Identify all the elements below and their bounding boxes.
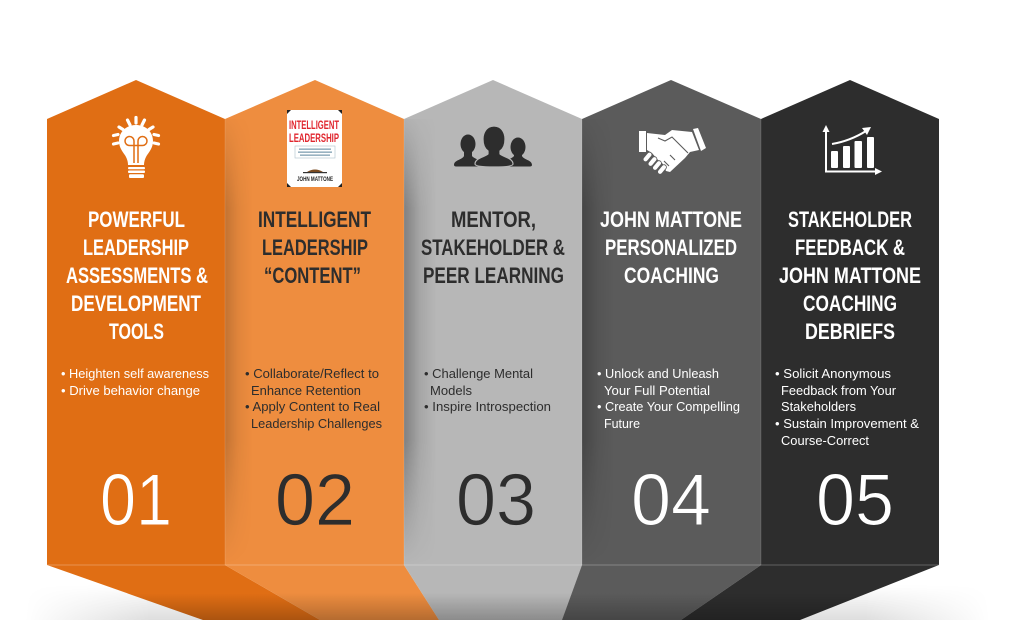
bullets 01 (61, 366, 209, 398)
heading 05 (779, 207, 921, 344)
heading 01: POWERFUL (88, 207, 185, 232)
panel 02 body (225, 80, 404, 565)
bullets 03: Models (430, 383, 472, 398)
heading 01: LEADERSHIP (83, 235, 189, 260)
bullets 04: • Unlock and Unleash (597, 366, 719, 381)
heading 02: “CONTENT” (264, 263, 361, 288)
panel: 04 personalized coaching (562, 80, 761, 620)
panel 05 base (681, 565, 939, 620)
bullets 02: Enhance Retention (251, 383, 361, 398)
bullets 05: Stakeholders (781, 399, 856, 414)
panel 03 base (404, 565, 582, 620)
icon: people group (454, 126, 532, 167)
heading 05: DEBRIEFS (805, 319, 895, 344)
panel 01 base (47, 565, 320, 620)
icon: book cover: INTELLIGENT (289, 118, 339, 132)
bullets 03: • Inspire Introspection (424, 399, 551, 414)
panel 02 base (225, 565, 439, 620)
heading 04: COACHING (624, 263, 719, 288)
ground shadow (57, 594, 958, 620)
heading 02: INTELLIGENT (258, 207, 371, 232)
bullets 05 (775, 366, 919, 448)
heading 01 (66, 207, 208, 344)
bullets 01: • Heighten self awareness (61, 366, 209, 381)
panel: 01 powerful leadership assessments (47, 80, 320, 620)
heading 02: LEADERSHIP (262, 235, 368, 260)
panel: 05 feedback and debriefs (681, 80, 939, 620)
icon: handshake (639, 128, 706, 175)
number 03: 03 (456, 460, 536, 541)
bullets 05: • Sustain Improvement & (775, 416, 919, 431)
bullets 02: • Collaborate/Reflect to (245, 366, 379, 381)
icon: book cover (287, 110, 342, 187)
panel 01 body (47, 80, 225, 565)
panel 04 body (582, 80, 761, 565)
number 05: 05 (816, 460, 894, 541)
bullets 05: • Solicit Anonymous (775, 366, 892, 381)
heading 05: STAKEHOLDER (788, 207, 912, 232)
base shading (126, 593, 868, 620)
heading 03: STAKEHOLDER & (421, 235, 565, 260)
panel 03 body (404, 80, 582, 565)
heading 01: TOOLS (109, 319, 164, 344)
bullets 02: • Apply Content to Real (245, 399, 380, 414)
number 02: 02 (275, 460, 355, 541)
heading 04: JOHN MATTONE (600, 207, 742, 232)
heading 03 (421, 207, 565, 288)
panel: 02 intelligent leadership content (225, 80, 439, 620)
heading 01: ASSESSMENTS & (66, 263, 208, 288)
heading 05: JOHN MATTONE (779, 263, 921, 288)
heading 04: PERSONALIZED (605, 235, 737, 260)
icon: book cover: JOHN MATTONE (297, 177, 333, 183)
bullets 04: • Create Your Compelling (597, 399, 740, 414)
bullets 04 (597, 366, 740, 431)
panel: 03 mentor stakeholder peer learning (404, 80, 582, 620)
heading 05: FEEDBACK & (795, 235, 905, 260)
heading 01: DEVELOPMENT (71, 291, 201, 316)
bullets 05: Feedback from Your (781, 383, 897, 398)
bullets 02 (245, 366, 382, 431)
bullets 04: Future (604, 416, 640, 431)
bullets 03: • Challenge Mental (424, 366, 533, 381)
panel 05 body (761, 80, 939, 565)
icon: book cover: LEADERSHIP (289, 131, 339, 145)
number 01: 01 (100, 460, 172, 541)
bullets 02: Leadership Challenges (251, 416, 382, 431)
icon: growth chart (822, 125, 882, 175)
bullets 04: Your Full Potential (604, 383, 710, 398)
bullets 01: • Drive behavior change (61, 383, 200, 398)
bullets 05: Course-Correct (781, 433, 869, 448)
heading 02 (258, 207, 371, 288)
heading 05: COACHING (803, 291, 897, 316)
icon: light bulb (114, 118, 158, 178)
heading 04 (600, 207, 742, 288)
number 04: 04 (631, 460, 711, 541)
panel 04 base (562, 565, 761, 620)
heading 03: MENTOR, (451, 207, 536, 232)
bullets 03 (424, 366, 551, 414)
heading 03: PEER LEARNING (423, 263, 564, 288)
